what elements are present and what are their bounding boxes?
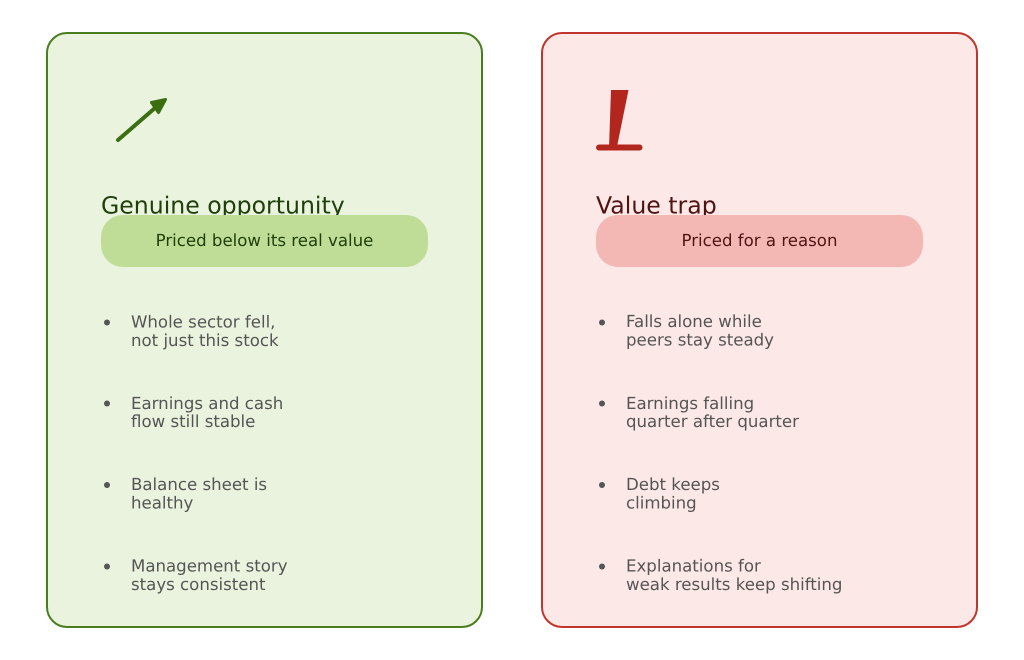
bullet: earnings and cash flow <box>104 394 283 431</box>
bullet: earnings falling: Earnings falling <box>626 394 754 413</box>
pill: priced for a reason <box>596 215 923 267</box>
bullet: balance sheet: Balance sheet is <box>131 475 267 494</box>
panel: value trap <box>542 33 977 627</box>
pill: priced below its real value: Priced below its real value <box>156 231 373 250</box>
bullet: explanations shifting <box>599 556 842 594</box>
bullet: debt keeps climbing <box>599 475 720 512</box>
heading: genuine opportunity: Genuine opportunity <box>101 192 345 220</box>
bullet: management story <box>104 556 288 594</box>
bullet: management story: stays consistent <box>131 575 266 594</box>
bullet: earnings and cash flow: Earnings and cash <box>131 394 283 413</box>
bullet: whole sector fell <box>104 312 279 350</box>
bullet: debt keeps climbing: Debt keeps <box>626 475 720 494</box>
bullet: falls alone: peers stay steady <box>626 330 774 350</box>
bullet: earnings and cash flow: flow still stable <box>131 412 255 431</box>
bullet: explanations shifting: Explanations for <box>626 556 761 576</box>
icon: up arrow <box>118 100 166 140</box>
panel: genuine opportunity <box>47 33 482 627</box>
bullet: whole sector fell: Whole sector fell, <box>131 312 275 332</box>
bullet: falls alone: Falls alone while <box>626 312 762 331</box>
bullet: explanations shifting: weak results keep shifting <box>626 575 842 594</box>
pill: priced below its real value <box>101 215 428 267</box>
bullet: balance sheet <box>104 475 267 512</box>
bullet: falls alone <box>599 312 774 350</box>
bullet: debt keeps climbing: climbing <box>626 494 697 512</box>
bullet: management story: Management story <box>131 556 288 576</box>
heading: value trap: Value trap <box>596 192 717 220</box>
bullet: earnings falling <box>599 394 799 431</box>
bullet: whole sector fell: not just this stock <box>131 331 279 350</box>
bullet: earnings falling: quarter after quarter <box>626 412 799 431</box>
pill: priced for a reason: Priced for a reason <box>682 231 837 250</box>
icon: warning mark <box>596 90 642 150</box>
bullet: balance sheet: healthy <box>131 494 194 512</box>
